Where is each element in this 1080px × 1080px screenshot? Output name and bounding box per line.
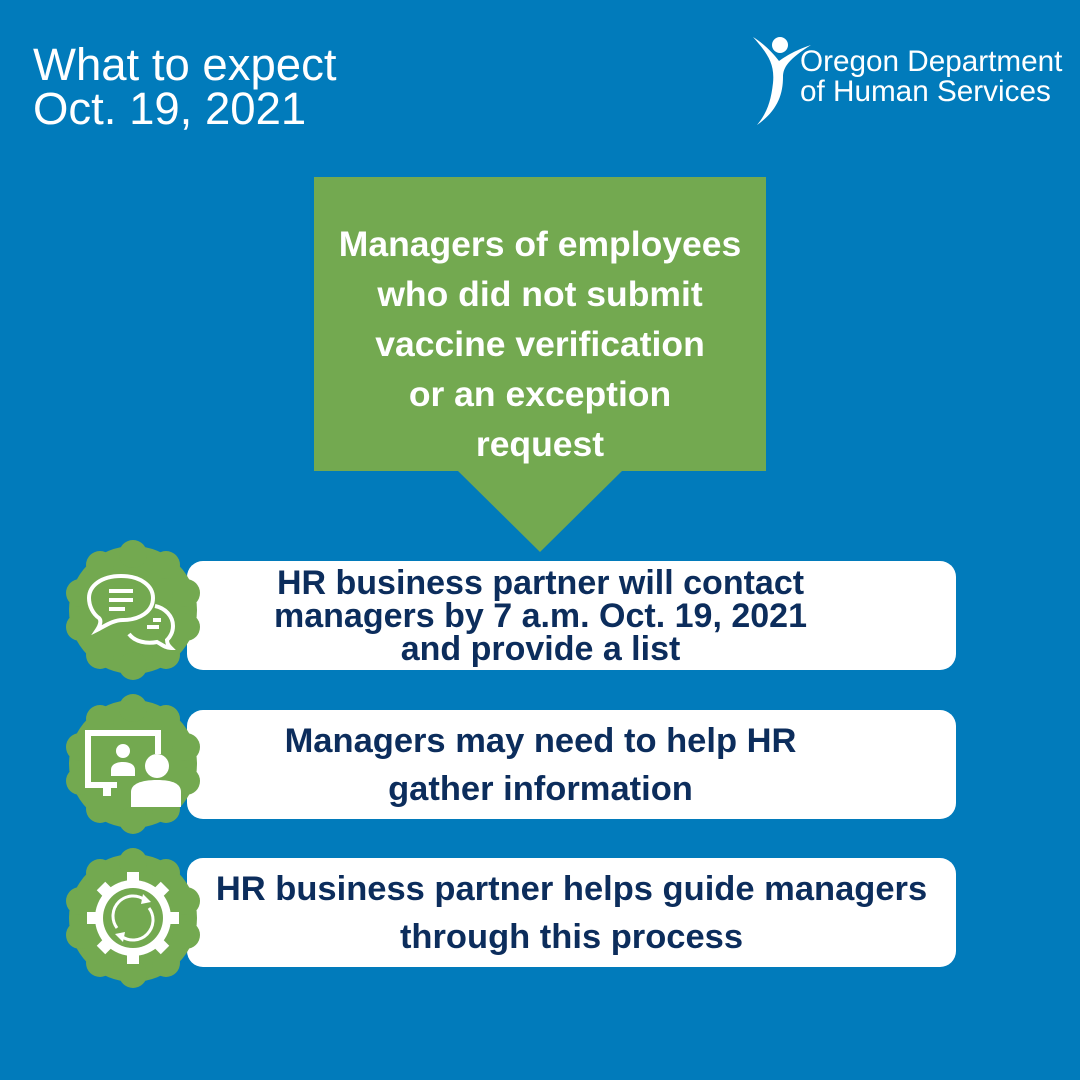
box 2: Managers may need to help HR <box>285 722 796 760</box>
box 1: managers by 7 a.m. Oct. 19, 2021 <box>274 597 807 635</box>
icon: chat badge <box>66 540 200 680</box>
box 3: through this process <box>400 918 743 956</box>
icon: gear cycle badge <box>66 848 200 988</box>
title: What to expect <box>33 39 336 90</box>
title: Oct. 19, 2021 <box>33 83 306 134</box>
logo: Oregon Department of Human Services: Oregon Department <box>800 45 1062 78</box>
box 1 <box>187 561 956 670</box>
panel: green callout: who did not submit <box>377 274 703 314</box>
panel: green callout <box>314 177 766 471</box>
box 2 <box>187 710 956 819</box>
icon: figure <box>753 37 811 125</box>
arrow: callout pointer <box>458 471 622 552</box>
box 3: HR business partner helps guide managers <box>216 870 927 908</box>
box 2: gather information <box>388 770 693 808</box>
panel: green callout: or an exception <box>409 374 671 414</box>
logo: Oregon Department of Human Services: of Human Services <box>800 75 1051 108</box>
box 3 <box>187 858 956 967</box>
title <box>33 39 336 134</box>
box 1: and provide a list <box>401 630 680 668</box>
icon: video call badge <box>66 694 200 834</box>
logo: Oregon Department of Human Services <box>753 37 1062 125</box>
panel: green callout: request <box>476 424 604 464</box>
box 1: HR business partner will contact <box>277 564 804 602</box>
panel: green callout: vaccine verification <box>375 324 705 364</box>
panel: green callout: Managers of employees <box>339 224 741 264</box>
